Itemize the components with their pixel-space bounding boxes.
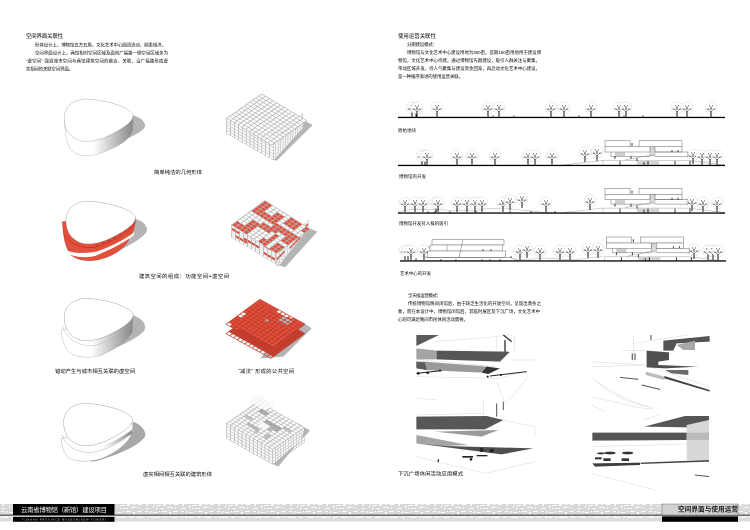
body text: all-day operation: 全天候运营模式： xyxy=(408,292,441,299)
project title block: 云南省博物馆（新馆）建设项目 xyxy=(21,505,107,514)
caption: sunken plaza mode: 下沉广场休闲活动应用模式 xyxy=(398,470,464,478)
section: attracting people: 博物馆开发对人群的吸引 xyxy=(399,220,448,227)
caption: subtraction public space: “减法” 形成的公共空间 xyxy=(238,367,294,375)
body text: phased construction: 物馆，文化艺术中心待建。通过博物馆先期建设，吸引人群关注与聚集， xyxy=(398,57,540,64)
panel: operational text xyxy=(398,32,542,80)
project title block xyxy=(13,504,114,522)
body text: spatial interface: 形体设计上，博物馆五方五角，文化艺术中心圆润流动，刚柔相济。 xyxy=(35,42,166,48)
body text: spatial interface: “虚空间” 强调城市空间与两馆建筑空间的融合、关联，沿广福路形成虚 xyxy=(26,58,169,64)
form: simple solid blob xyxy=(64,99,145,156)
section: art centre development xyxy=(399,237,726,277)
body text: phased construction: 是一种循序渐进的使用运营关联。 xyxy=(398,73,463,80)
section: original site: 原始地块 xyxy=(398,127,417,134)
body text: phased construction: 博物馆与文化艺术中心建设用地为300亩，首期150亩用地用于建设博 xyxy=(407,49,542,56)
render: sunken plaza right xyxy=(591,335,710,490)
form: red and white block box xyxy=(232,201,317,267)
section: art centre development: 艺术中心的开发 xyxy=(400,270,432,277)
body text: all-day operation xyxy=(398,292,542,323)
heading: operation: 使用运营关联性 xyxy=(398,32,437,40)
caption: staggered void space: 错动产生与城市相互关联的虚空间 xyxy=(55,367,135,375)
section: original site xyxy=(398,102,725,134)
art centre building xyxy=(425,240,520,261)
body text: phased construction: 分期建设模式： xyxy=(407,41,437,48)
body text: spatial interface: 实相间的关联空间界面。 xyxy=(26,66,73,72)
caption: simple geometry: 简单纯洁的几何形体 xyxy=(154,168,203,176)
form: white stepped block massing xyxy=(227,396,310,467)
section: attracting people xyxy=(398,188,725,227)
form: blob with staggered void space xyxy=(61,298,145,357)
footer band xyxy=(0,504,750,522)
form: blob with solid and void xyxy=(61,403,145,462)
panel: spatial interface text xyxy=(26,32,169,72)
body text: spatial interface: 空间界面设计上，两馆相对空间区域及面向广福路一侧空间区域多为 xyxy=(35,50,168,56)
form: red subtracted public space xyxy=(226,299,312,358)
project title block: YUNNAN PROVINCE MUSEUM(NEW TOWER) xyxy=(22,517,106,521)
body text: all-day operation: 心则可满足晚间市民休闲活动需要。 xyxy=(398,316,468,323)
heading: spatial interface: 空间界面关联性 xyxy=(26,32,64,40)
body text: phased construction xyxy=(398,41,542,80)
body text: spatial interface xyxy=(26,42,169,72)
caption: composition of spaces: 建筑空间的组成：功能空间+虚空间 xyxy=(139,272,229,280)
caption: solid void massing: 虚实相间相互关联的建筑形体 xyxy=(143,470,213,478)
body text: all-day operation: 传统博物馆晚间闭馆后，由于缺乏生活化的开放空间，呈现出萧条之 xyxy=(408,300,542,307)
section: museum development xyxy=(398,141,725,180)
form: white grid box xyxy=(227,94,313,161)
form: blob with red function spaces xyxy=(62,201,147,261)
section: museum development: 博物馆的开发 xyxy=(399,173,427,180)
section title block xyxy=(662,504,738,522)
section title block: 空间界面与使用运营 xyxy=(678,504,738,514)
body text: all-day operation: 象，而在本设计中，博物馆闭馆后，其临时展区及下沉广场，文化艺术中 xyxy=(398,308,540,315)
render: sunken plaza left xyxy=(416,335,535,473)
body text: phased construction: 带动区域开发，待人气聚集与建设资金回笼，再启动文化艺术中心建设， xyxy=(398,65,540,72)
